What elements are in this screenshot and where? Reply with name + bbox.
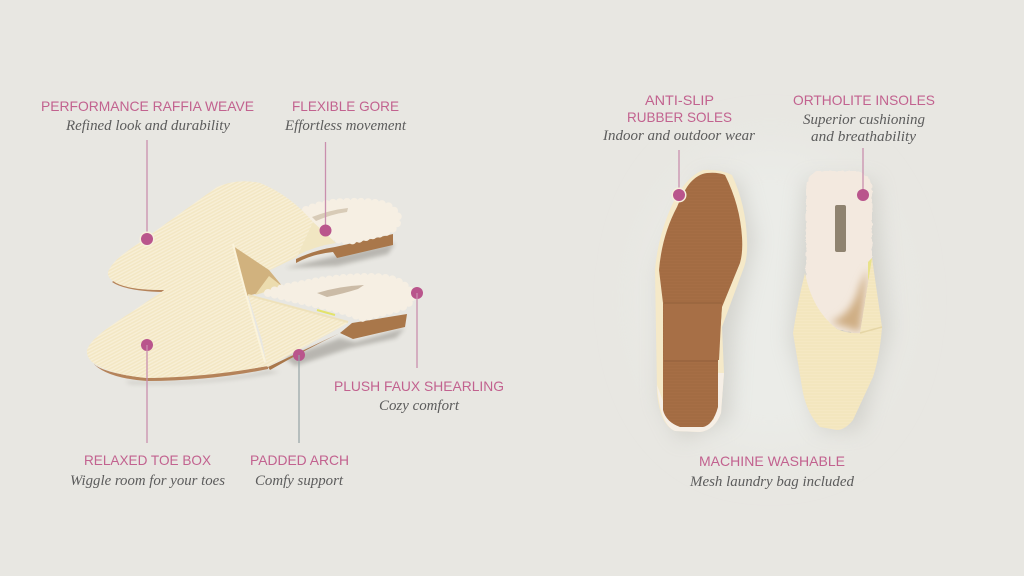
callout: anti-slip rubber soles: ANTI-SLIP xyxy=(645,92,714,108)
callout: anti-slip rubber soles xyxy=(602,92,755,202)
panel: side view slippers xyxy=(87,181,412,384)
callout: flexible gore: FLEXIBLE GORE xyxy=(292,98,399,114)
callout: machine washable: Mesh laundry bag included xyxy=(689,474,855,490)
icon: slipper sole xyxy=(655,170,755,440)
callout: plush faux shearling: PLUSH FAUX SHEARLING xyxy=(334,378,504,394)
callout: ortholite insoles: and breathability xyxy=(811,129,917,145)
callout: ortholite insoles xyxy=(793,92,935,201)
icon: front slipper xyxy=(87,244,412,384)
callout: padded arch xyxy=(250,349,349,489)
callout: ortholite insoles: ORTHOLITE INSOLES xyxy=(793,92,935,108)
callout: anti-slip rubber soles: RUBBER SOLES xyxy=(627,109,732,125)
callout: performance raffia weave: Refined look and durability xyxy=(65,118,231,134)
callout: machine washable: MACHINE WASHABLE xyxy=(699,453,845,469)
callout: plush faux shearling: Cozy comfort xyxy=(379,398,460,414)
callout: padded arch: PADDED ARCH xyxy=(250,452,349,468)
callout: relaxed toe box xyxy=(70,339,225,489)
icon: slipper top with insole xyxy=(790,171,890,430)
callout: ortholite insoles: Superior cushioning xyxy=(803,112,925,128)
callout: relaxed toe box: Wiggle room for your toes xyxy=(70,473,225,489)
callout: plush faux shearling xyxy=(334,287,504,414)
icon: back slipper xyxy=(108,181,398,292)
callout: padded arch: Comfy support xyxy=(255,473,344,489)
callout: flexible gore xyxy=(284,98,407,236)
callout: performance raffia weave xyxy=(41,98,254,246)
callout: machine washable xyxy=(689,453,855,490)
panel: top and bottom view slippers xyxy=(655,170,890,440)
callout: performance raffia weave: PERFORMANCE RAFFIA WEAVE xyxy=(41,98,254,114)
icon: brand tag xyxy=(835,205,846,252)
callout: relaxed toe box: RELAXED TOE BOX xyxy=(84,452,212,468)
callout: anti-slip rubber soles: Indoor and outdoor wear xyxy=(602,128,755,144)
callout: flexible gore: Effortless movement xyxy=(284,118,407,134)
